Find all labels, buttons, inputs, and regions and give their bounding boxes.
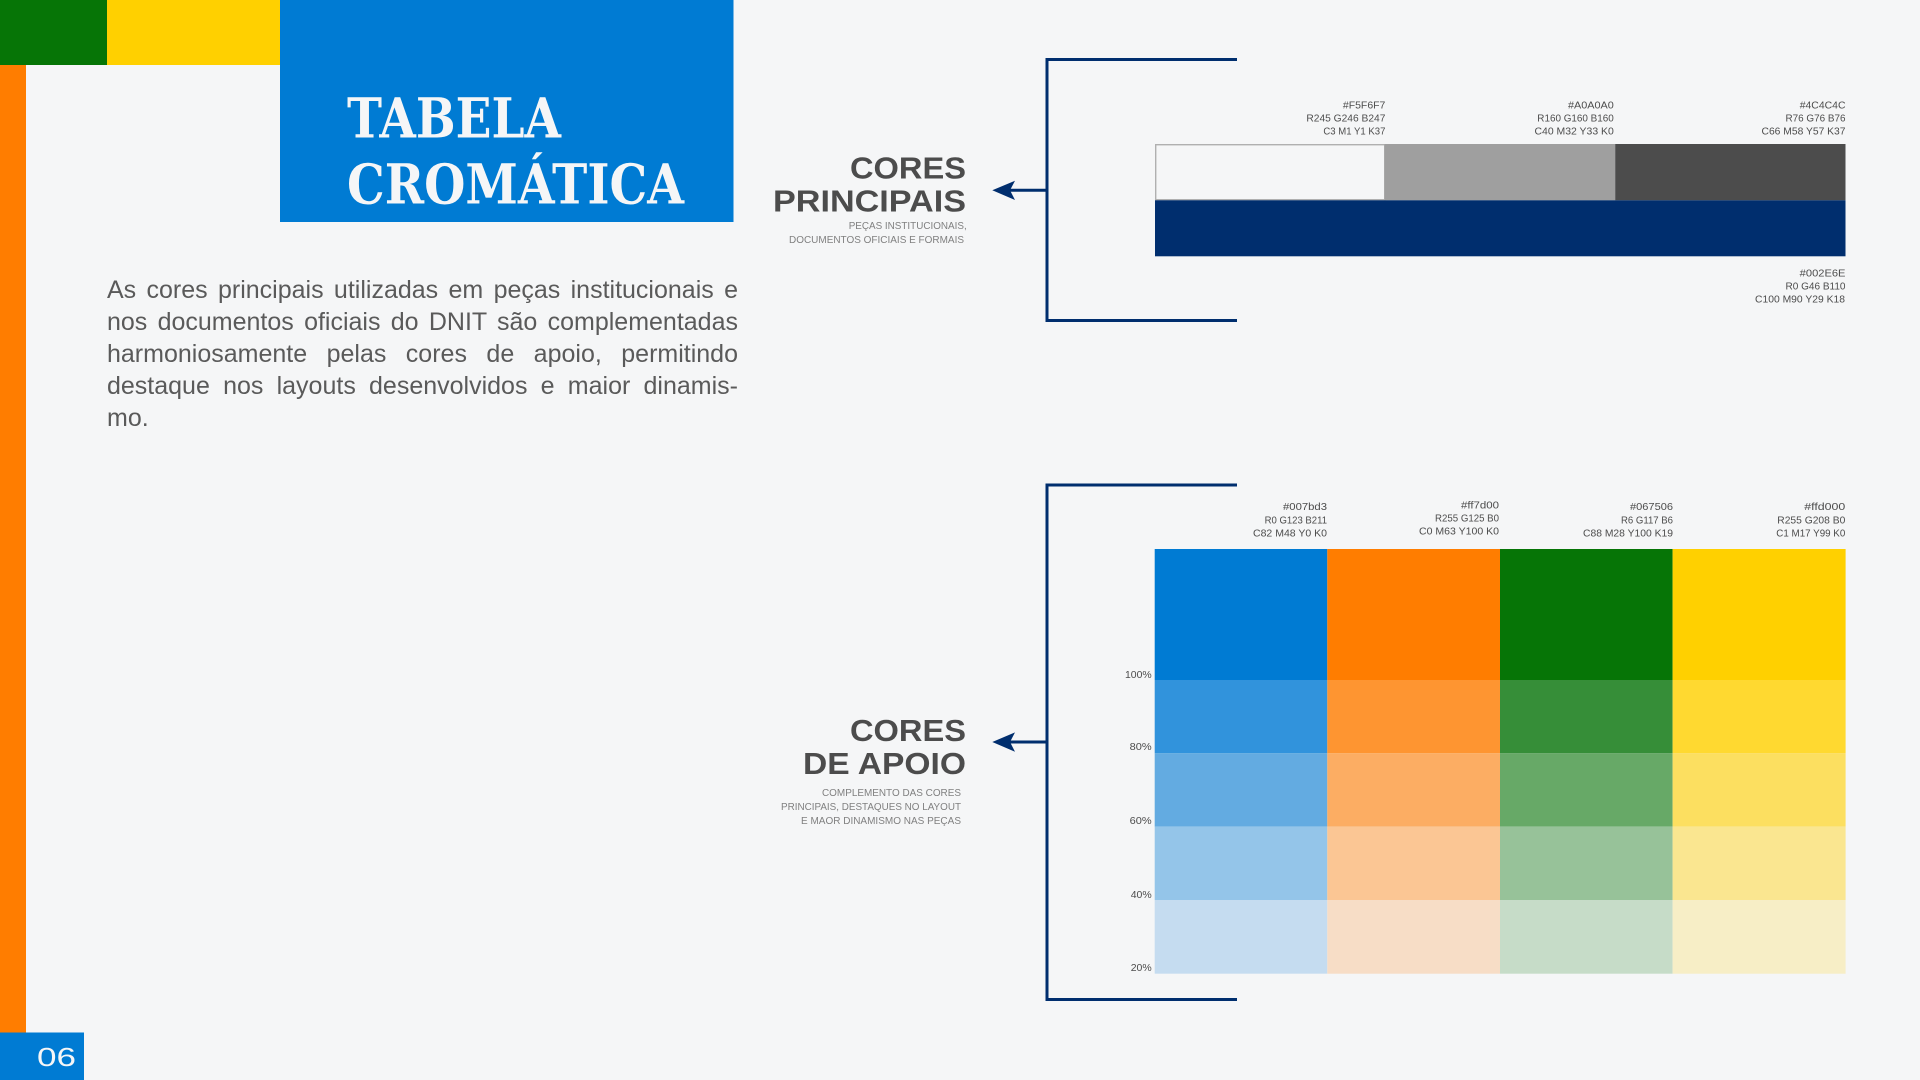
body text block: destaque nos layouts desenvolvidos e maior dinamis- <box>107 372 738 400</box>
heading: cores principais: DOCUMENTOS OFICIAIS E FORMAIS <box>789 234 964 246</box>
heading: cores de apoio: COMPLEMENTO DAS CORES <box>822 787 961 799</box>
orange column <box>1327 549 1500 974</box>
primary colour swatches <box>1155 144 1846 256</box>
yellow column <box>1673 549 1846 974</box>
primary colour codes: F5F6F7: C3 M1 Y1 K37 <box>1323 126 1386 138</box>
support colour codes: yellow: #ffd000 <box>1804 501 1845 513</box>
primary colour codes: F5F6F7 <box>1306 100 1386 138</box>
tint percentage labels: 100% <box>1125 669 1152 681</box>
header colour blocks <box>0 0 280 1033</box>
primary colour codes: A0A0A0: #A0A0A0 <box>1568 100 1614 112</box>
tint percentage labels: 60% <box>1130 815 1152 827</box>
heading: cores principais <box>773 150 967 246</box>
primary colour codes: 002E6E <box>1755 267 1846 306</box>
support colour codes: green: C88 M28 Y100 K19 <box>1583 527 1673 539</box>
heading: cores de apoio: DE APOIO <box>803 746 966 781</box>
body text block: harmoniosamente pelas cores de apoio, permitindo <box>107 340 738 368</box>
primary colour codes: 002E6E: C100 M90 Y29 K18 <box>1755 294 1845 306</box>
primary colour codes: A0A0A0: C40 M32 Y33 K0 <box>1534 126 1614 138</box>
primary colour codes: 4C4C4C: #4C4C4C <box>1800 100 1846 112</box>
body text block <box>107 276 738 432</box>
support colour codes: yellow <box>1776 501 1845 539</box>
support colour codes: orange <box>1419 499 1499 538</box>
heading: cores principais: CORES <box>850 150 966 185</box>
page number: 06 <box>37 1042 76 1072</box>
support colour codes: orange: C0 M63 Y100 K0 <box>1419 526 1499 538</box>
support colour codes: yellow: C1 M17 Y99 K0 <box>1776 527 1845 539</box>
heading: cores principais: PRINCIPAIS <box>773 183 966 218</box>
heading: cores principais: PEÇAS INSTITUCIONAIS, <box>849 220 967 232</box>
primary colour codes: 002E6E: R0 G46 B110 <box>1786 280 1846 292</box>
body text block: nos documentos oficiais do DNIT são complementadas <box>107 308 738 336</box>
body text block: mo. <box>107 404 149 432</box>
title panel <box>280 0 734 222</box>
body text block: As cores principais utilizadas em peças institucionais e <box>107 276 738 304</box>
primary colour codes: A0A0A0: R160 G160 B160 <box>1537 112 1614 124</box>
title: TABELA <box>347 86 562 150</box>
heading: cores de apoio: E MAOR DINAMISMO NAS PEÇAS <box>801 815 961 827</box>
tint percentage labels: 40% <box>1131 889 1152 901</box>
tint percentage labels: 80% <box>1130 741 1152 753</box>
primary colour codes: 4C4C4C: R76 G76 B76 <box>1786 112 1846 124</box>
primary colour codes: 4C4C4C <box>1762 100 1846 138</box>
support colour codes: blue: #007bd3 <box>1283 501 1327 513</box>
heading: cores de apoio: CORES <box>850 713 966 748</box>
primary colour codes: A0A0A0 <box>1534 100 1614 138</box>
primary colour codes: 002E6E: #002E6E <box>1800 267 1846 279</box>
support colour codes: blue: C82 M48 Y0 K0 <box>1253 527 1327 539</box>
tint percentage labels <box>1125 669 1152 974</box>
support colour codes: yellow: R255 G208 B0 <box>1777 514 1845 526</box>
support colour codes: orange: R255 G125 B0 <box>1435 513 1499 525</box>
heading: cores de apoio: PRINCIPAIS, DESTAQUES NO LAYOUT <box>781 801 962 813</box>
primary colour codes: 4C4C4C: C66 M58 Y57 K37 <box>1762 126 1846 138</box>
support colour codes: blue: R0 G123 B211 <box>1265 514 1327 526</box>
support colour codes: green <box>1583 501 1673 539</box>
green column <box>1500 549 1673 974</box>
support colour codes: orange: #ff7d00 <box>1461 499 1499 511</box>
tint percentage labels: 20% <box>1131 962 1152 974</box>
blue column <box>1155 549 1327 974</box>
title <box>347 86 685 216</box>
title: CROMÁTICA <box>347 152 685 216</box>
support colour codes: blue <box>1253 501 1327 539</box>
primary colour codes: F5F6F7: #F5F6F7 <box>1343 100 1386 112</box>
support colour codes: green: #067506 <box>1630 501 1673 513</box>
page number <box>0 1032 84 1080</box>
bracket and arrow: cores de apoio <box>992 485 1237 1000</box>
support colour codes: green: R6 G117 B6 <box>1621 514 1673 526</box>
heading: cores de apoio <box>781 713 966 827</box>
primary colour codes: F5F6F7: R245 G246 B247 <box>1306 112 1386 124</box>
support colour tint grid <box>1155 549 1846 974</box>
bracket and arrow: cores principais <box>992 60 1237 320</box>
